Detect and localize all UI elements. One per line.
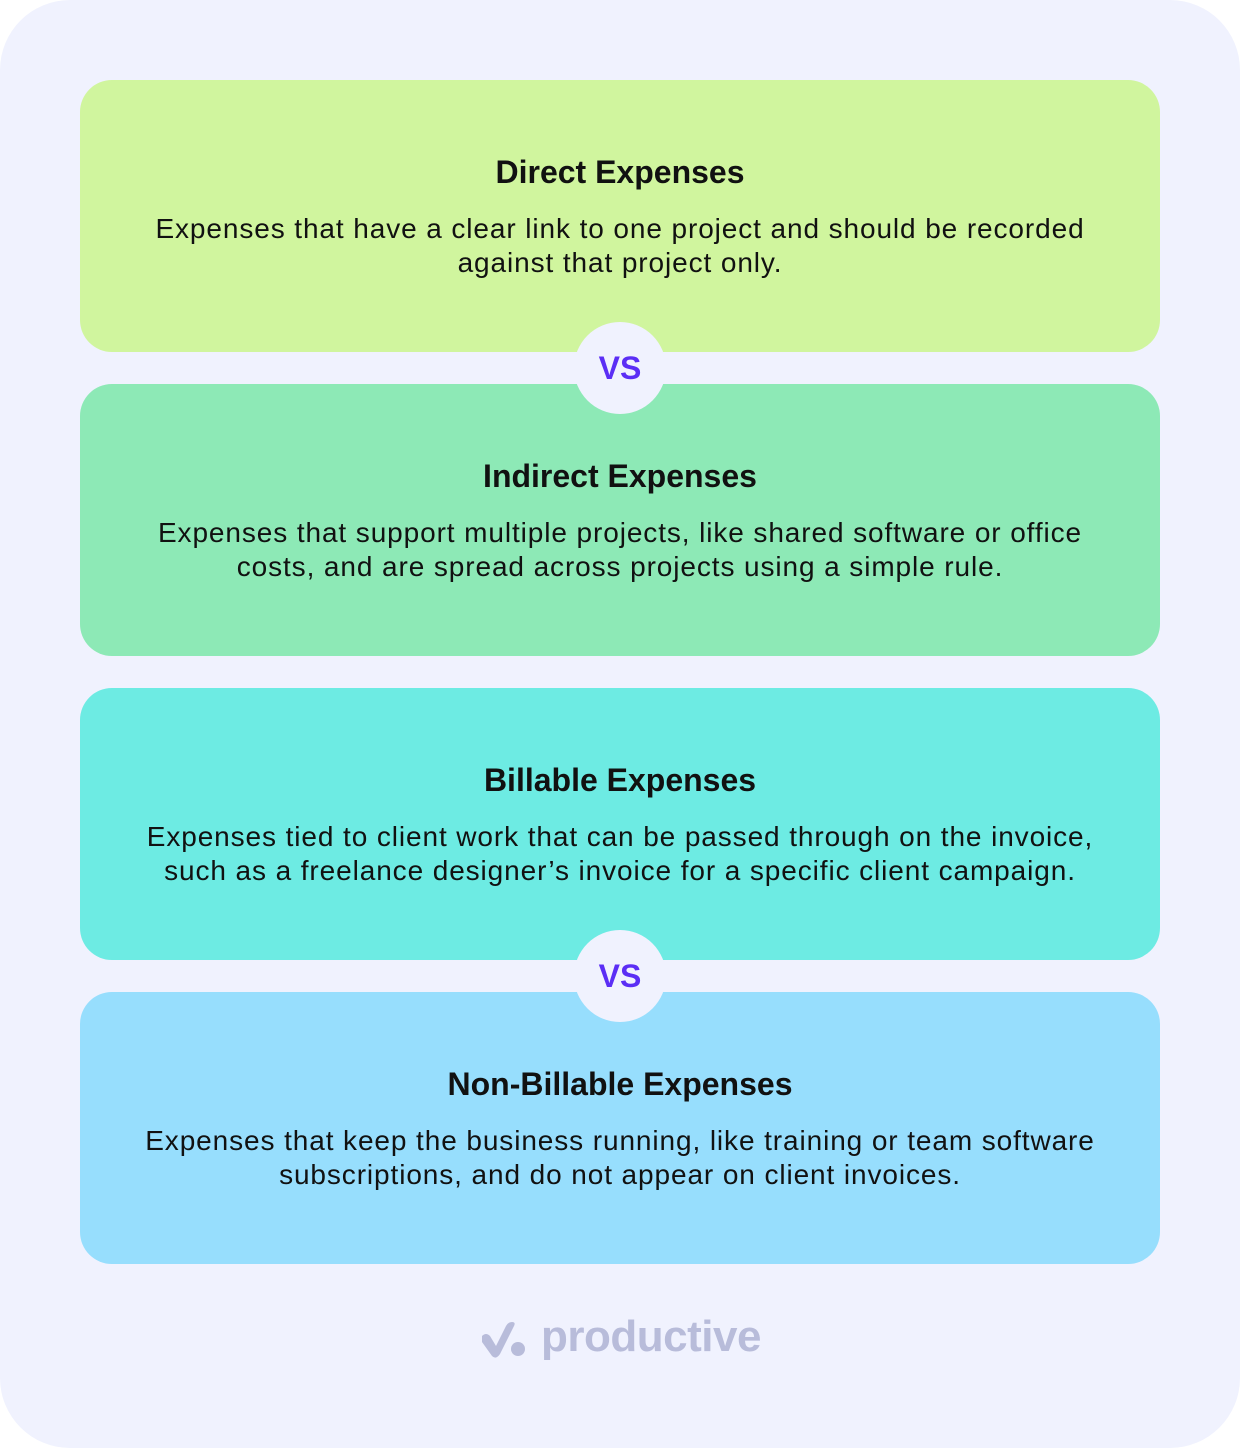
heading: indirect: Indirect Expenses	[483, 458, 757, 494]
logo text: productive	[541, 1312, 761, 1361]
text: billable: such as a freelance designer’s invoice for a specific client campaign.	[164, 855, 1076, 886]
text: non-billable: subscriptions, and do not appear on client invoices.	[279, 1159, 961, 1190]
text: indirect: Expenses that support multiple projects, like shared software or office	[158, 517, 1082, 548]
text: indirect: costs, and are spread across projects using a simple rule.	[237, 551, 1003, 582]
text: direct: Expenses that have a clear link to one project and should be recorded	[155, 213, 1085, 244]
icon: check mark	[482, 1322, 525, 1358]
panel: indirect expenses	[80, 384, 1160, 656]
text: non-billable	[145, 1125, 1095, 1190]
heading: direct: Direct Expenses	[495, 154, 744, 190]
heading: billable: Billable Expenses	[484, 762, 756, 798]
panel: direct expenses	[80, 80, 1160, 352]
vs badge 2: VS	[599, 958, 641, 994]
logo: productive	[482, 1312, 761, 1361]
heading: non-billable: Non-Billable Expenses	[448, 1066, 792, 1102]
text: billable	[147, 821, 1093, 886]
vs badge 1: VS	[599, 350, 641, 386]
vs badge 2	[574, 930, 666, 1022]
vs badge 1	[574, 322, 666, 414]
panel: billable expenses	[80, 688, 1160, 960]
text: non-billable: Expenses that keep the business running, like training or team software	[145, 1125, 1095, 1156]
text: indirect	[158, 517, 1082, 582]
panel: non-billable expenses	[80, 992, 1160, 1264]
text: direct: against that project only.	[458, 247, 782, 278]
text: direct	[155, 213, 1085, 278]
text: billable: Expenses tied to client work that can be passed through on the invoice,	[147, 821, 1093, 852]
